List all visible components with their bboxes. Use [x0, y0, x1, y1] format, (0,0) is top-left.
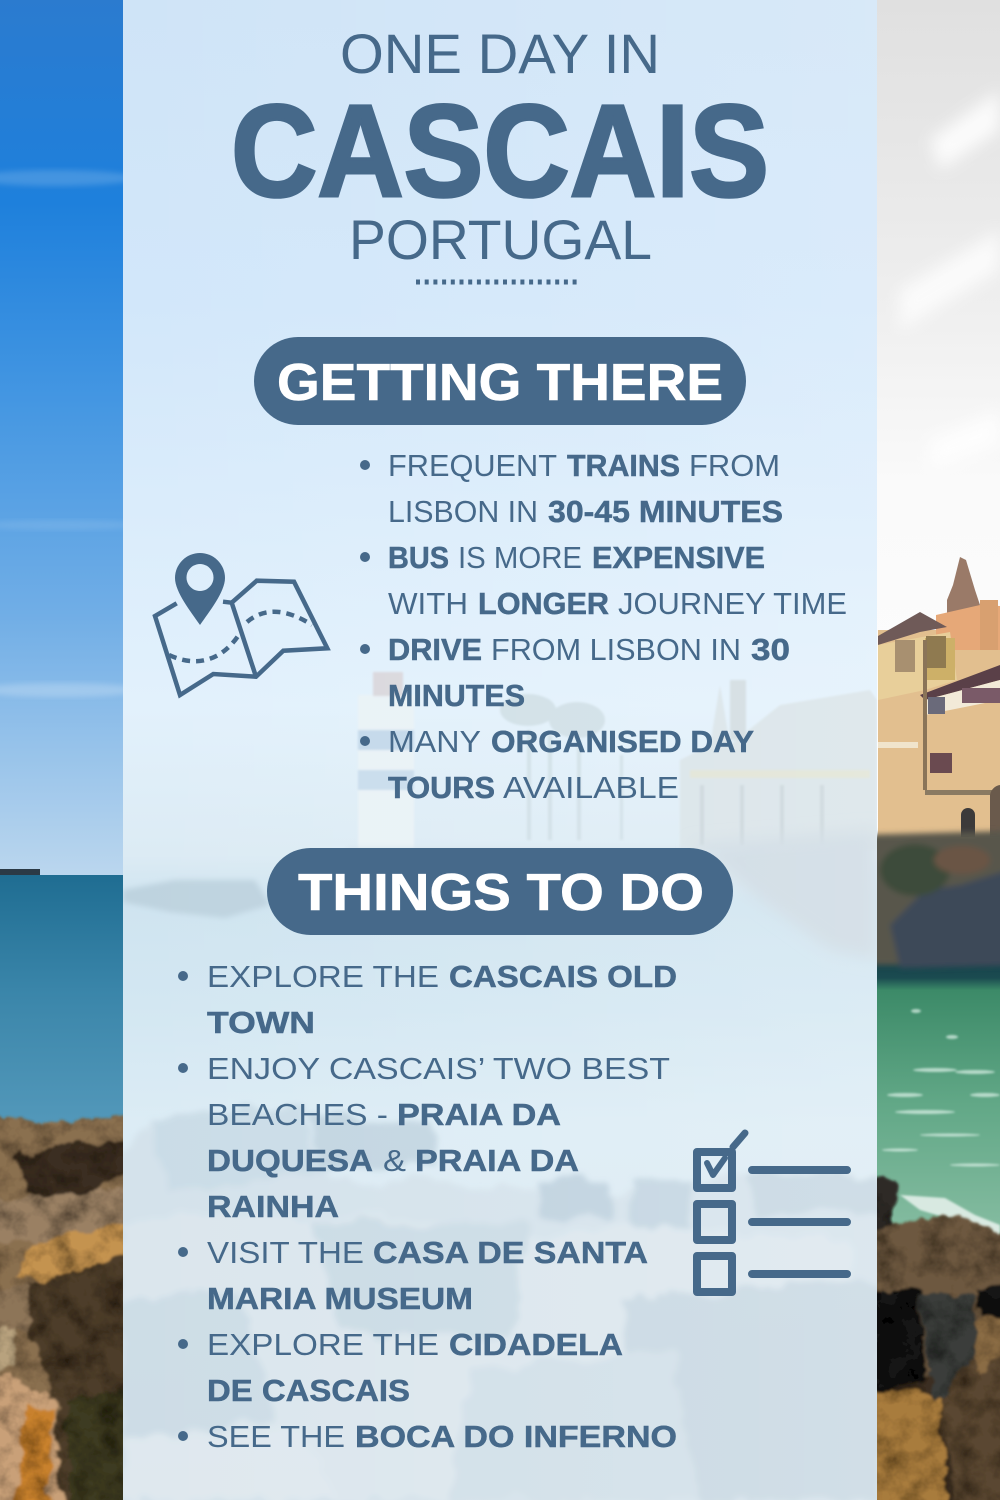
sunlit building on right: [878, 557, 1000, 845]
cliff and trees below building: [860, 830, 1000, 968]
list: getting there: TRAINS: [567, 448, 680, 483]
list: things to do: RAINHA: [207, 1189, 339, 1224]
list: things to do: &: [383, 1143, 406, 1178]
list: getting there: MANY: [388, 724, 481, 759]
list: getting there: FROM LISBON IN: [491, 632, 741, 667]
list: things to do: CIDADELA: [449, 1327, 623, 1362]
list: things to do: PRAIA DA: [415, 1143, 579, 1178]
heading pill: things to do: [267, 848, 733, 935]
sparkles on right sea: [882, 1009, 1000, 1240]
list: getting there: FROM: [689, 448, 780, 483]
list: things to do: SEE THE: [207, 1419, 345, 1454]
ghosted villa: [680, 680, 877, 850]
list: getting there: FREQUENT: [388, 448, 557, 483]
list: getting there: MINUTES: [388, 678, 525, 713]
list: getting there: LISBON IN: [388, 494, 538, 529]
heading pill: getting there: [254, 337, 746, 425]
list: things to do: EXPLORE THE: [207, 959, 439, 994]
title block: [231, 22, 769, 271]
panel tint: [123, 0, 877, 1500]
list: getting there: ORGANISED DAY: [491, 724, 754, 759]
list: things to do: BOCA DO INFERNO: [355, 1419, 677, 1454]
icon: checklist: [697, 1133, 847, 1292]
list: things to do: CASCAIS OLD: [449, 959, 677, 994]
list: getting there: JOURNEY TIME: [618, 586, 847, 621]
list: things to do: [178, 959, 677, 1454]
list: things to do: PRAIA DA: [397, 1097, 561, 1132]
list: things to do: BEACHES -: [207, 1097, 388, 1132]
list: things to do: MARIA MUSEUM: [207, 1281, 473, 1316]
ghosted lighthouse: [358, 672, 414, 850]
distant ship: [0, 869, 40, 875]
icon: map with location pin: [155, 553, 327, 695]
title line: Portugal: PORTUGAL: [349, 208, 652, 271]
ghosted shoreline: [123, 847, 414, 918]
list: getting there: EXPENSIVE: [592, 540, 765, 575]
sea left: [0, 875, 124, 1175]
list: getting there: 30: [751, 632, 790, 667]
list: things to do: CASA DE SANTA: [373, 1235, 648, 1270]
title line: Cascais: CASCAIS: [231, 77, 769, 224]
foreground rocks left: [0, 1118, 130, 1500]
ghosted palms: [500, 694, 623, 840]
foreground rocks right: [860, 1172, 1000, 1500]
heading pill: things to do: THINGS TO DO: [298, 864, 704, 922]
panel right lightening: [751, 0, 877, 1500]
list: things to do: EXPLORE THE: [207, 1327, 439, 1362]
list: things to do: TOWN: [207, 1005, 315, 1040]
list: getting there: 30-45 MINUTES: [548, 494, 783, 529]
list: things to do: VISIT THE: [207, 1235, 364, 1270]
ghosted foreground rocks: [110, 1105, 890, 1500]
list: things to do: ENJOY CASCAIS’ TWO BEST: [207, 1051, 670, 1086]
list: getting there: TOURS: [388, 770, 495, 805]
list: getting there: [360, 448, 847, 805]
list: getting there: AVAILABLE: [503, 770, 679, 805]
list: getting there: BUS: [388, 540, 449, 575]
sky: [0, 0, 1000, 880]
list: things to do: DUQUESA: [207, 1143, 373, 1178]
list: getting there: WITH: [388, 586, 468, 621]
title line: one day in: ONE DAY IN: [340, 22, 660, 85]
translucent centre panel: [110, 0, 890, 1500]
list: getting there: LONGER: [478, 586, 609, 621]
sea right: [876, 950, 1000, 1260]
list: getting there: IS MORE: [458, 540, 582, 575]
list: things to do: DE CASCAIS: [207, 1373, 410, 1408]
list: getting there: DRIVE: [388, 632, 482, 667]
heading pill: getting there: GETTING THERE: [277, 354, 723, 412]
